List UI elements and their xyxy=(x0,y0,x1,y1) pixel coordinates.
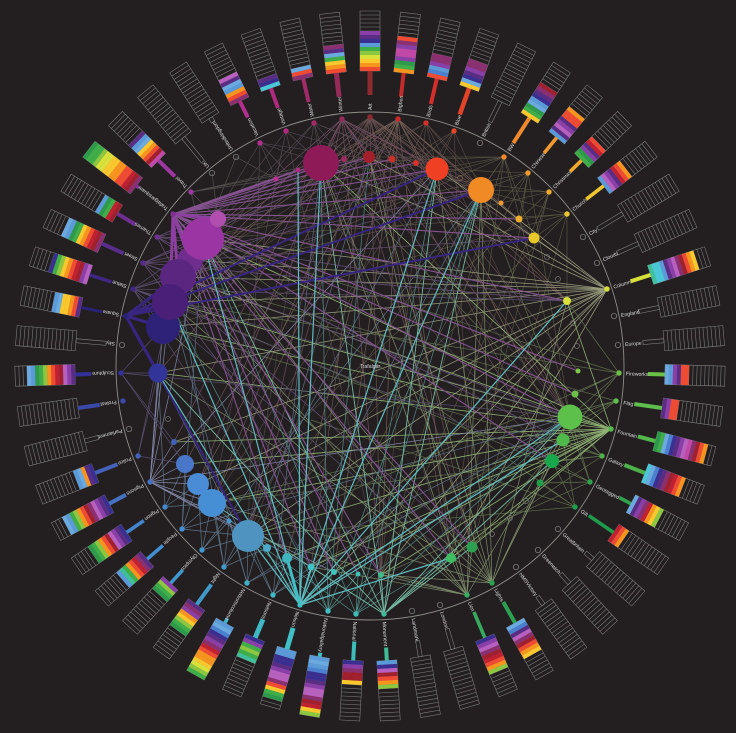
spoke: Winter xyxy=(320,12,351,113)
bubble: Street xyxy=(160,259,196,295)
spoke: National: National xyxy=(350,621,357,641)
links: Birds and Blue xyxy=(170,123,570,575)
spoke: Unitedkingdom: Unitedkingdom xyxy=(211,119,235,152)
spoke: Parliament: Parliament xyxy=(97,427,123,439)
spoke: Pigeons: Pigeons xyxy=(125,482,145,496)
spoke: Europe xyxy=(624,326,725,354)
spoke: Street: Street xyxy=(123,250,139,261)
links: Column hub xyxy=(158,157,607,575)
spoke: Trafalgarsquare: Trafalgarsquare xyxy=(137,184,170,211)
spoke: Birds: Birds xyxy=(426,104,435,118)
spoke: Clouds: Clouds xyxy=(602,251,620,263)
spoke: Statue: Statue xyxy=(112,278,128,289)
spoke: Nelsons xyxy=(223,598,280,697)
spoke: Square: Square xyxy=(102,308,120,317)
bubble: Water xyxy=(303,145,339,181)
network links xyxy=(121,117,619,614)
spoke: Blue xyxy=(447,28,499,128)
spoke: Column xyxy=(610,247,711,296)
links: Trafalgarsquare thick fan xyxy=(170,214,218,302)
spoke: People: People xyxy=(162,531,178,546)
spoke: Greatbritain: Greatbritain xyxy=(561,532,585,554)
spoke: Olympics: Olympics xyxy=(179,552,198,572)
spoke: Birds xyxy=(418,18,460,119)
spoke: Sky xyxy=(15,326,116,354)
spoke: Column: Column xyxy=(613,279,632,291)
spoke: Gilt: Gilt xyxy=(579,509,589,518)
spoke: Pigeons xyxy=(51,477,148,541)
spoke: Lion xyxy=(460,598,517,697)
links: Pigeons hub xyxy=(150,169,570,572)
spoke: Fountain: Fountain xyxy=(617,429,638,440)
spoke: Landmark: Landmark xyxy=(410,618,420,642)
spoke: Nelson: Nelson xyxy=(289,611,300,628)
spoke: Nationalgallery xyxy=(300,617,336,718)
bubble: Trafalgarsquare xyxy=(182,218,224,260)
spoke: Square xyxy=(20,286,121,325)
spoke: Nelsons: Nelsons xyxy=(259,600,272,620)
spoke: Sky: Sky xyxy=(106,339,115,346)
spoke: BW xyxy=(500,62,570,156)
spoke: Thames xyxy=(61,174,156,242)
spoke: Flag: Flag xyxy=(623,400,634,408)
spoke: Chinese: Chinese xyxy=(530,152,547,170)
spoke: Travel xyxy=(108,111,193,195)
spoke: Art xyxy=(360,11,380,110)
spoke: Fireworks xyxy=(626,363,725,386)
spoke: Monument: Monument xyxy=(381,621,388,647)
spoke: Galaxy: Galaxy xyxy=(607,457,625,469)
spoke: City: City xyxy=(588,227,599,237)
links: thin top-right hubs xyxy=(163,157,570,575)
spoke: British: British xyxy=(481,122,493,138)
empty outer nodes xyxy=(119,140,621,614)
spoke: Vacation xyxy=(204,43,266,141)
bubble: Fountain xyxy=(558,404,582,430)
spoke: Bigben xyxy=(389,12,420,113)
spoke: National xyxy=(340,621,365,721)
links: left hubs xyxy=(121,169,570,567)
spoke: Fireworks: Fireworks xyxy=(626,371,649,378)
spoke: Pigeon: Pigeon xyxy=(143,507,160,521)
spoke: Nelsonscolumn xyxy=(187,584,253,680)
links: Monument hub xyxy=(158,163,570,614)
spoke: Protest: Protest xyxy=(99,398,117,407)
bubble: Blue xyxy=(426,158,448,180)
spoke: Lion: Lion xyxy=(466,601,475,613)
spoke: Church xyxy=(567,141,657,218)
spoke: Protest xyxy=(17,393,118,426)
spoke: Unitedkingdom xyxy=(170,62,240,156)
spoke: Thames: Thames xyxy=(133,220,153,236)
links: lower-left hubs xyxy=(158,157,570,595)
spoke: Landmark xyxy=(404,617,440,718)
spoke: People xyxy=(95,526,183,606)
spoke: Trafalgarsquare xyxy=(83,141,173,218)
spoke: Europe: Europe xyxy=(625,341,642,348)
spoke: Olympics xyxy=(123,548,204,634)
spoke: Pigeon xyxy=(71,502,164,575)
spoke: Water: Water xyxy=(307,102,316,117)
spoke: Water xyxy=(280,18,322,119)
spoke: Greenwich xyxy=(536,548,617,634)
links: Square hub dark purple xyxy=(126,169,534,536)
bubble: Square xyxy=(146,310,180,344)
bubble: Night xyxy=(232,520,264,552)
spoke: UK: UK xyxy=(202,159,211,169)
links: Bigben xyxy=(163,119,570,575)
spoke: Street xyxy=(43,209,141,269)
links: Lights and Lion hubs xyxy=(158,157,570,595)
spoke: HMSVictory: HMSVictory xyxy=(517,572,538,598)
spoke: Gilt xyxy=(576,502,669,575)
center label: Trafalgar xyxy=(360,364,381,370)
links: Trafalgarsquare hub xyxy=(173,157,578,575)
inner bubbles xyxy=(146,145,582,578)
spoke: Art: Art xyxy=(368,103,374,110)
spoke: Lights: Lights xyxy=(492,588,505,603)
spoke: Chinese xyxy=(524,85,602,174)
spoke: Blue: Blue xyxy=(454,114,463,126)
spoke: Night: Night xyxy=(209,571,221,585)
spoke: Monument xyxy=(375,621,400,721)
spoke: City xyxy=(584,174,679,242)
spoke: Nationalgallery: Nationalgallery xyxy=(316,618,328,653)
spoke: Christmas: Christmas xyxy=(552,170,573,190)
spoke: Statue xyxy=(29,247,130,296)
spoke: Church: Church xyxy=(571,198,588,213)
spoke: London: London xyxy=(438,611,449,629)
spoke: Nelsonscolumn: Nelsonscolumn xyxy=(223,587,246,621)
spoke: Parliament xyxy=(24,421,125,466)
spoke: UK xyxy=(138,85,216,174)
spoke: Winter: Winter xyxy=(337,96,345,112)
spoke: Clouds xyxy=(599,209,697,269)
spoke: Galaxy xyxy=(605,450,704,504)
links: Winter and neighbours xyxy=(170,119,570,575)
links: Art xyxy=(158,117,578,575)
spoke: London xyxy=(433,609,480,709)
spoke: Travel: Travel xyxy=(175,175,189,189)
bubble: Thames xyxy=(177,247,203,273)
spoke: Vintage: Vintage xyxy=(276,107,288,126)
spoke: Night xyxy=(153,567,228,659)
links: lower teal hubs xyxy=(170,157,570,614)
spoke: Police: Police xyxy=(117,455,132,466)
links: Fireworks Flag Galaxy Geotagged Gilt xyxy=(163,163,619,575)
spoke: Christmas xyxy=(547,111,632,195)
spoke: Flag xyxy=(622,393,723,426)
spoke: Police xyxy=(36,450,135,504)
spoke: HMSVictory xyxy=(512,567,587,659)
spoke: Bigben: Bigben xyxy=(397,95,405,112)
spoke: Greenwich: Greenwich xyxy=(540,553,561,576)
links: Nelson hub cyan xyxy=(158,163,570,605)
links: Fountain hub xyxy=(158,163,611,575)
spoke: Lights xyxy=(487,584,553,680)
spoke: British xyxy=(474,43,536,141)
spoke: Sculpture: Sculpture xyxy=(92,369,114,376)
bubble: BW xyxy=(468,177,494,203)
spoke: England xyxy=(619,286,720,325)
bubble: Statue xyxy=(152,284,188,320)
spoke: Vintage xyxy=(241,28,293,128)
spoke: Geotagged xyxy=(592,477,689,541)
spoke: Sculpture xyxy=(15,363,114,386)
spoke: Vacation: Vacation xyxy=(246,117,261,137)
outer ring nodes xyxy=(118,114,622,617)
spoke: Fountain xyxy=(615,421,716,466)
spoke: Geotagged: Geotagged xyxy=(595,484,620,501)
spoke: Greatbritain xyxy=(557,526,645,606)
spoke: England: England xyxy=(621,309,640,319)
spoke: Nelson xyxy=(260,609,307,709)
ring xyxy=(116,112,624,620)
spoke: BW: BW xyxy=(507,142,516,153)
